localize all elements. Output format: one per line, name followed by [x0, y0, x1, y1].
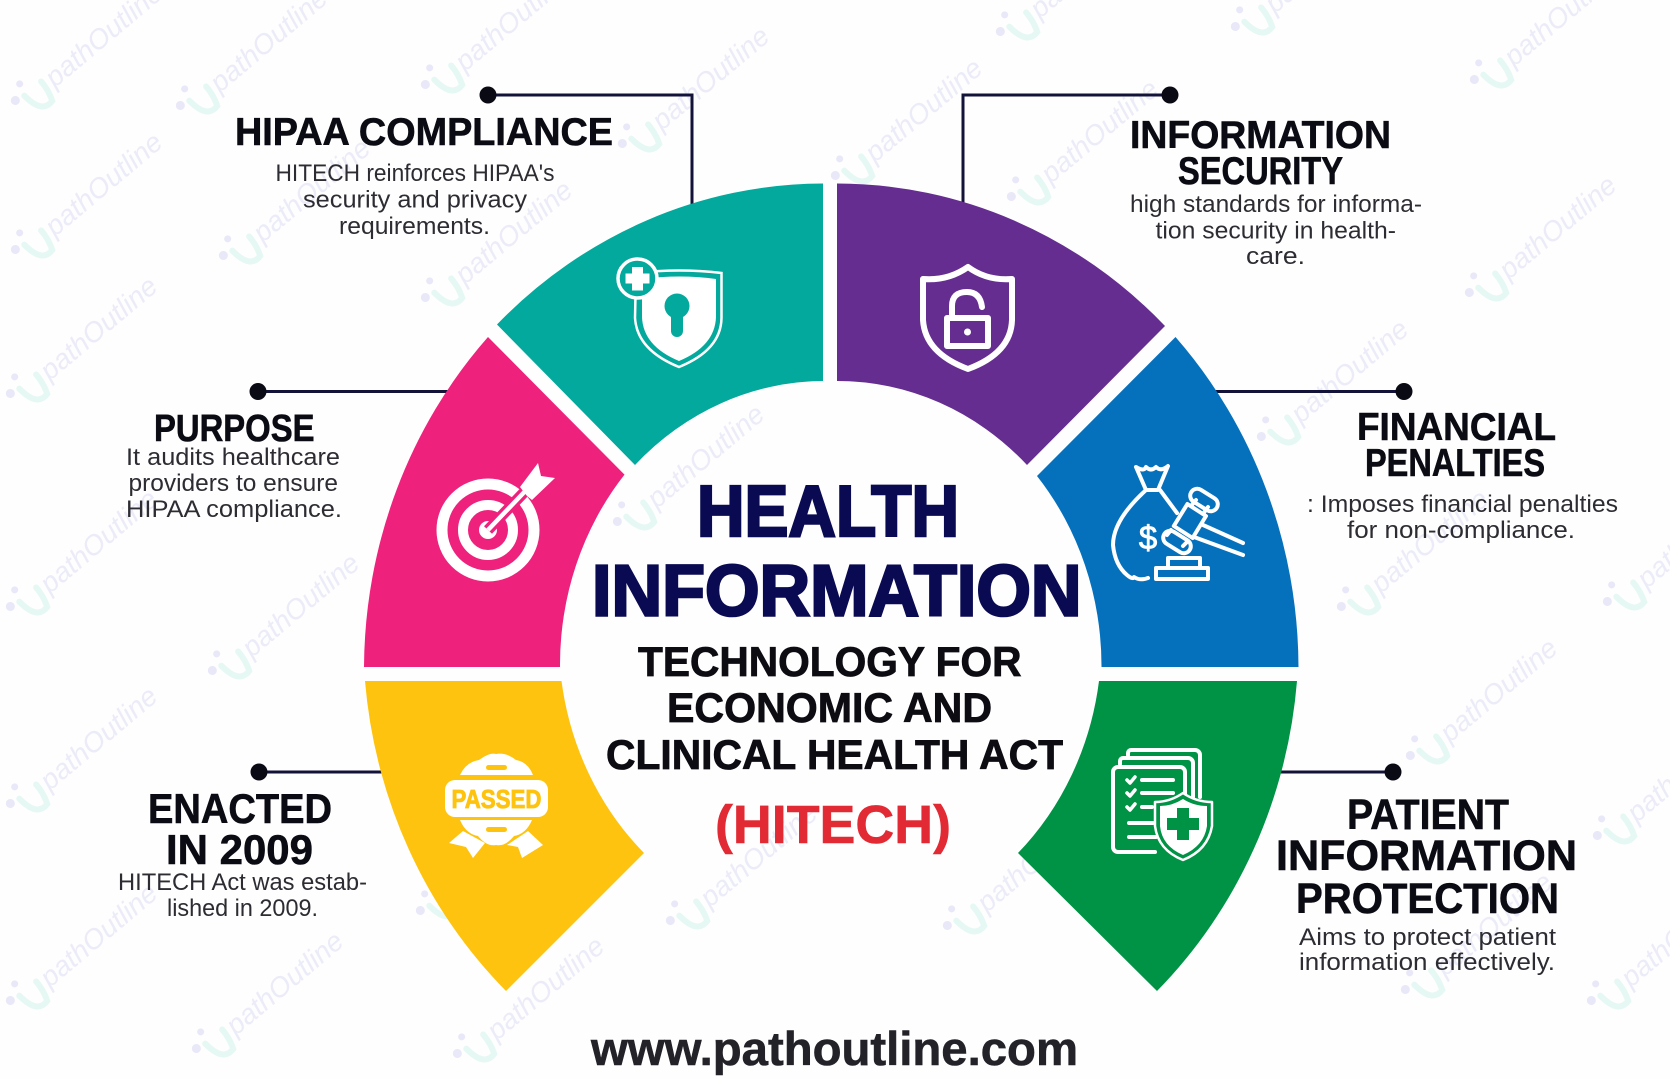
text: financial penalties: for non-compliance. — [1347, 517, 1575, 544]
text: information security: INFORMATION — [1130, 114, 1391, 157]
text: purpose: PURPOSE — [154, 408, 314, 450]
text: HIPAA compliance: security and privacy — [303, 186, 527, 214]
connector: information security — [963, 86, 1178, 210]
text: financial penalties: PENALTIES — [1365, 442, 1545, 485]
text: enacted in 2009: ENACTED — [148, 785, 332, 832]
text: information security: tion security in health- — [1156, 218, 1396, 244]
text: financial penalties: : Imposes financial penalties — [1307, 491, 1618, 518]
segment: blue financial penalties — [1037, 337, 1298, 667]
title block: ECONOMIC AND — [667, 684, 992, 731]
text: enacted in 2009: lished in 2009. — [167, 895, 318, 922]
infographic canvas: pathOutline — [858, 52, 988, 169]
icon: money bag and gavel — [1113, 466, 1243, 579]
segment: yellow enacted — [365, 681, 644, 991]
website footer: www.pathoutline.com — [590, 1022, 1078, 1075]
text: information security: SECURITY — [1178, 150, 1343, 193]
connector: patient information — [1278, 764, 1402, 780]
text: patient information protection — [1276, 791, 1577, 976]
infographic canvas: pathOutline — [219, 925, 349, 1042]
text: HIPAA compliance: requirements. — [339, 213, 490, 240]
infographic canvas: pathOutline — [443, 787, 573, 904]
text: patient information protection: INFORMATION — [1276, 832, 1577, 880]
text: HIPAA compliance — [235, 111, 613, 240]
infographic canvas: pathOutline — [1492, 169, 1622, 286]
text: purpose: It audits healthcare — [126, 444, 340, 471]
infographic canvas: pathOutline — [1034, 73, 1164, 190]
text: HIPAA compliance: HIPAA COMPLIANCE — [235, 111, 613, 154]
text: enacted in 2009: HITECH Act was estab- — [118, 869, 367, 896]
text: financial penalties: FINANCIAL — [1357, 406, 1556, 449]
title block: HEALTH — [697, 472, 959, 552]
connector: purpose — [250, 383, 450, 400]
icon: target with arrow — [442, 463, 555, 576]
text: patient information protection: PROTECTION — [1296, 875, 1559, 923]
infographic canvas: pathOutline — [448, 174, 578, 291]
title block: INFORMATION — [592, 552, 1082, 632]
infographic canvas: pathOutline — [970, 802, 1100, 919]
infographic canvas: pathOutline — [33, 877, 163, 994]
infographic canvas: pathOutline — [1364, 483, 1494, 600]
text: purpose: providers to ensure — [128, 470, 338, 497]
text: purpose — [126, 408, 342, 523]
icon: shield with keyhole and plus — [618, 259, 722, 367]
text: patient information protection: Aims to protect patient — [1299, 924, 1556, 951]
text: enacted in 2009 — [118, 785, 367, 922]
connector: HIPAA compliance — [480, 86, 692, 210]
infographic canvas: pathOutline — [235, 547, 365, 664]
title block: (HITECH) — [715, 795, 951, 855]
text: patient information protection: information effectively. — [1299, 949, 1555, 976]
infographic canvas: pathOutline — [645, 20, 775, 137]
text: information security: care. — [1246, 243, 1305, 270]
infographic canvas: pathOutline — [1433, 632, 1563, 749]
segment: pink purpose — [364, 337, 624, 667]
icon: passed badge — [445, 754, 548, 858]
text: patient information protection: PATIENT — [1347, 791, 1509, 839]
title block: TECHNOLOGY FOR — [638, 638, 1022, 685]
infographic canvas: pathOutline — [246, 132, 376, 249]
infographic canvas: pathOutline — [33, 483, 163, 600]
segment: teal HIPAA — [497, 184, 823, 465]
infographic canvas: pathOutline — [33, 270, 163, 387]
icon: shield with open padlock — [923, 267, 1012, 369]
infographic canvas: pathOutline — [693, 797, 823, 914]
connector: financial penalties — [1215, 383, 1412, 400]
segment: green patient protection — [1018, 681, 1297, 991]
icon: documents with shield — [1113, 750, 1212, 860]
title block — [592, 472, 1082, 855]
text: purpose: HIPAA compliance. — [126, 496, 342, 523]
segment: purple information security — [837, 184, 1165, 465]
infographic canvas: pathOutline — [480, 930, 610, 1047]
infographic canvas: pathOutline — [38, 126, 168, 243]
icon: passed badge: PASSED — [452, 784, 542, 814]
text: enacted in 2009: IN 2009 — [166, 826, 313, 873]
icon: money bag and gavel: $ — [1139, 519, 1157, 556]
text: information security — [1130, 114, 1422, 270]
title block: CLINICAL HEALTH ACT — [606, 731, 1063, 778]
text: information security: high standards for informa- — [1130, 191, 1422, 218]
infographic canvas: pathOutline — [640, 398, 770, 515]
infographic canvas: pathOutline — [1284, 313, 1414, 430]
infographic canvas: pathOutline — [1428, 866, 1558, 983]
text: financial penalties — [1307, 406, 1618, 544]
connector: enacted — [250, 764, 385, 780]
text: HIPAA compliance: HITECH reinforces HIPAA's — [276, 160, 554, 187]
infographic canvas: pathOutline — [33, 680, 163, 797]
